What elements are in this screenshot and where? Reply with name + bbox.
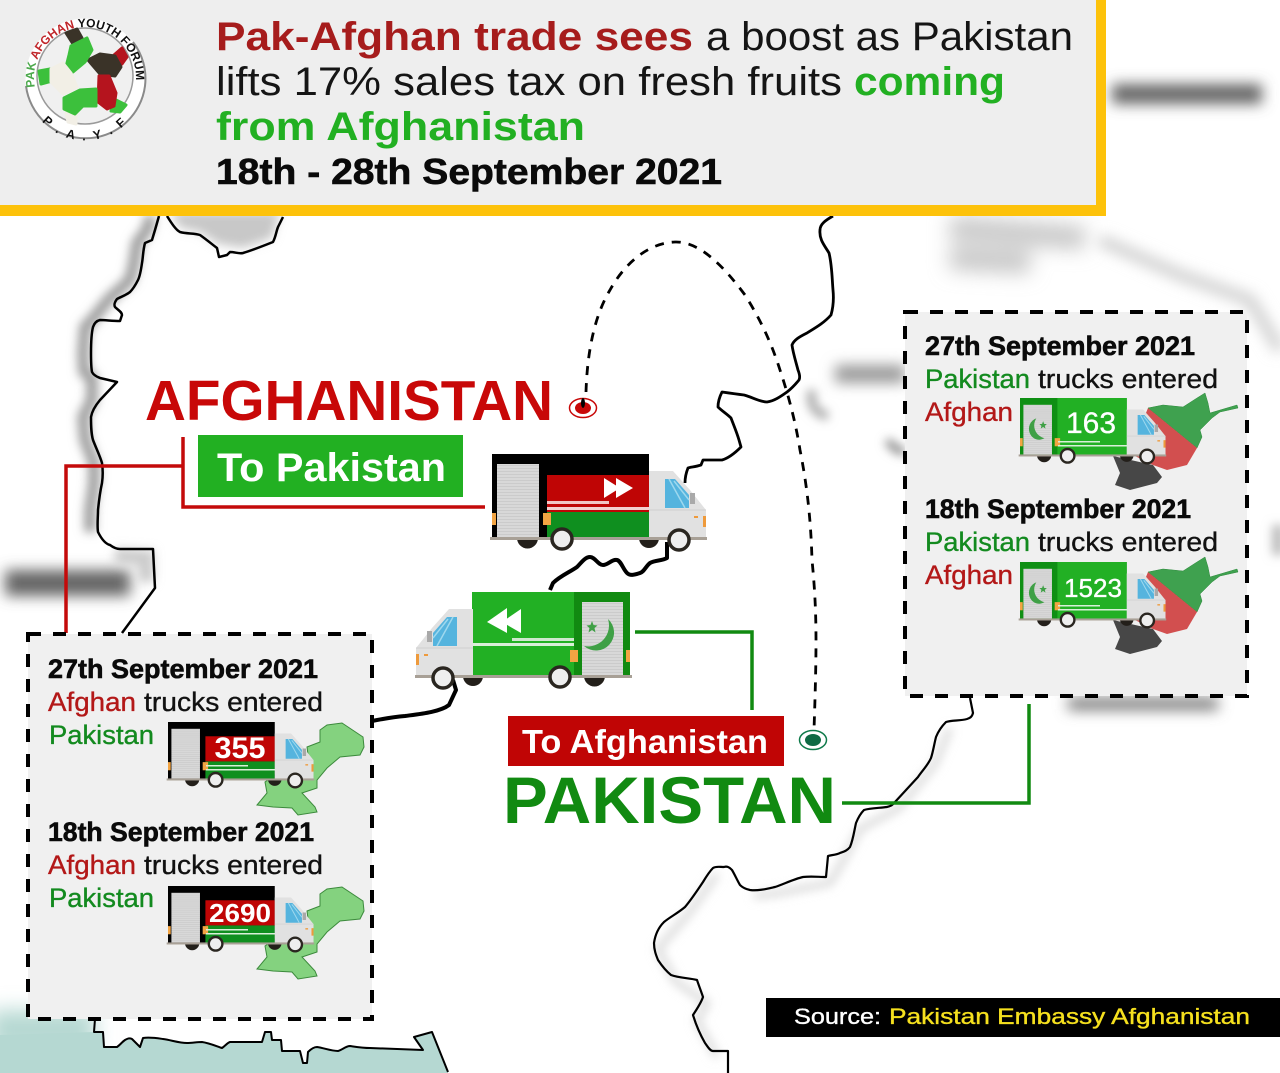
headline: lifts 17% sales tax on fresh fruits — [216, 60, 842, 104]
27 September text: Pakistan — [925, 364, 1030, 394]
18 September text — [925, 494, 1218, 590]
headline: a boost as Pakistan — [706, 15, 1073, 59]
27 September text: trucks entered — [144, 687, 323, 717]
heading: Pakistan: PAKISTAN — [503, 763, 836, 837]
label: To Afghanistan: To Afghanistan — [522, 723, 768, 760]
18 September text: Pakistan — [49, 883, 154, 913]
truck: Pakistani truck heading to Afghanistan — [415, 592, 632, 688]
map: northern border notch — [167, 216, 283, 257]
18 September text: Pakistan — [925, 527, 1030, 557]
map: sea — [0, 1010, 448, 1073]
27 September graphic: 163 trucks: 163 — [1066, 407, 1116, 440]
label: To Pakistan — [198, 435, 463, 497]
27 September text: 27th September 2021 — [48, 654, 318, 684]
label: To Pakistan: To Pakistan — [217, 446, 446, 490]
heading: Afghanistan: AFGHANISTAN — [145, 369, 553, 433]
date range: 18th - 28th September 2021 — [216, 151, 722, 192]
green connector lines — [635, 632, 1029, 803]
headline — [216, 15, 1073, 149]
source bar: Source: — [794, 1004, 881, 1029]
map: southern coast — [94, 1019, 448, 1072]
headline: from Afghanistan — [216, 105, 585, 149]
border connector to left panel — [372, 680, 456, 721]
logo: PAK AFGHAN YOUTH FORUM — [26, 18, 144, 88]
27 September text: trucks entered — [1038, 364, 1218, 394]
map: western border — [91, 216, 159, 633]
27 September text: 27th September 2021 — [925, 331, 1195, 361]
27 September text: Afghan — [925, 397, 1013, 427]
27 September text: Pakistan — [49, 720, 154, 750]
panel: Pakistan trucks entering Afghanistan — [905, 312, 1247, 696]
18 September graphic: 1523 trucks — [1019, 557, 1238, 654]
marker: Pakistan — [800, 730, 826, 750]
border connector between trucks — [550, 542, 667, 590]
27 September text — [925, 331, 1218, 427]
headline: Pak-Afghan trade sees — [216, 15, 693, 59]
map: eastern border lower — [654, 698, 973, 1073]
headline: coming — [854, 60, 1005, 104]
label: To Afghanistan — [508, 716, 784, 766]
18 September text: 18th September 2021 — [48, 817, 314, 847]
logo: P . A . Y . F — [42, 116, 124, 140]
map: border shadows — [83, 212, 950, 1057]
marker: Afghanistan — [570, 398, 596, 418]
18 September text: Afghan — [925, 560, 1013, 590]
red connector lines — [66, 437, 485, 633]
18 September text: trucks entered — [144, 850, 323, 880]
blurred background labels and shadows — [5, 84, 1280, 710]
18 September text: trucks entered — [1038, 527, 1218, 557]
27 September graphic: 355 trucks: 355 — [214, 732, 266, 765]
18 September graphic: 2690 trucks: 2690 — [209, 898, 271, 928]
panel: Afghan trucks entering Pakistan — [28, 634, 372, 1019]
map: eastern border — [685, 216, 833, 483]
27 September graphic: 355 trucks — [167, 722, 364, 815]
27 September graphic: 163 trucks — [1019, 393, 1238, 490]
18 September text — [48, 817, 323, 913]
dashed route arc — [586, 242, 816, 730]
source bar: Pakistan Embassy Afghanistan — [889, 1004, 1250, 1029]
truck: Afghan truck heading to Pakistan — [490, 454, 707, 550]
18 September text: 18th September 2021 — [925, 494, 1191, 524]
logo — [25, 18, 146, 140]
27 September text: Afghan — [48, 687, 136, 717]
source bar — [766, 998, 1280, 1037]
18 September text: Afghan — [48, 850, 136, 880]
18 September graphic: 1523 trucks: 1523 — [1064, 573, 1122, 603]
27 September text — [48, 654, 323, 750]
18 September graphic: 2690 trucks — [167, 886, 364, 979]
header panel — [0, 0, 1106, 256]
